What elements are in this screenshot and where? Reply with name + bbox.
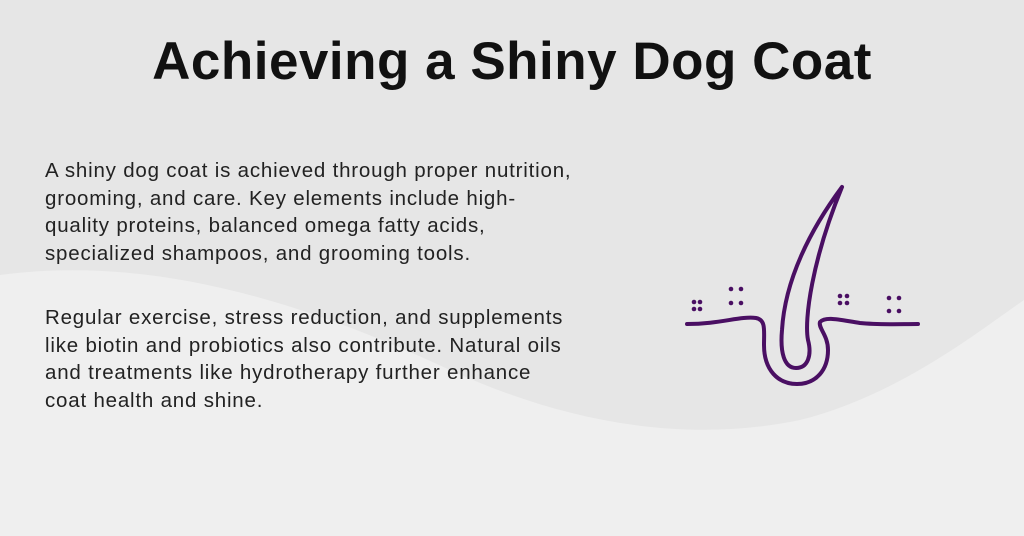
text block: intro: A shiny dog coat is achieved through proper nutrition,	[45, 159, 571, 182]
text block: extras: Regular exercise, stress reduction, and supplements	[45, 306, 563, 329]
text block: extras: coat health and shine.	[45, 389, 263, 412]
text block: extras	[45, 306, 563, 412]
text block: extras: like biotin and probiotics also contribute. Natural oils	[45, 334, 562, 357]
title: Achieving a Shiny Dog Coat	[152, 32, 872, 91]
text block: extras: and treatments like hydrotherapy further enhance	[45, 361, 531, 384]
text block: intro: specialized shampoos, and grooming tools.	[45, 242, 471, 265]
text block: intro: grooming, and care. Key elements include high-	[45, 187, 516, 210]
text block: intro	[45, 159, 571, 265]
text block: intro: quality proteins, balanced omega fatty acids,	[45, 214, 486, 237]
